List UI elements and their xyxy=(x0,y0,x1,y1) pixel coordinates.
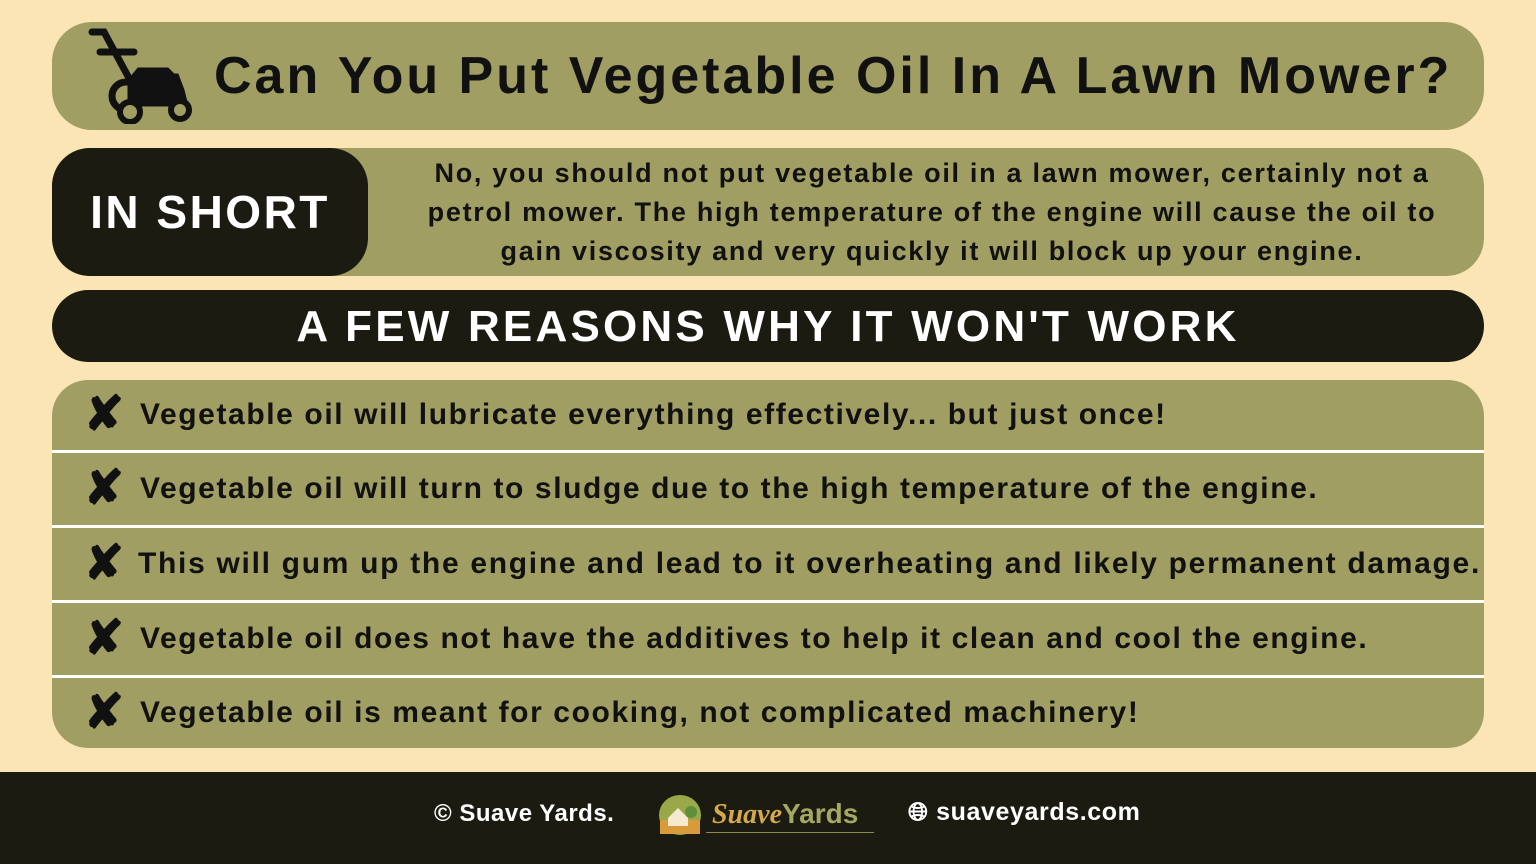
reason 3: ✘ xyxy=(84,537,124,590)
reason 5: ✘ xyxy=(84,686,124,739)
footer xyxy=(0,772,1536,864)
reason 5 xyxy=(52,678,1484,748)
reason 3 xyxy=(52,528,1484,600)
heading: reasons xyxy=(52,290,1484,362)
reason 4: Vegetable oil does not have the additives to help it clean and cool the engine. xyxy=(140,622,1368,655)
copyright: © Suave Yards. xyxy=(434,800,614,827)
logo: SuaveYards xyxy=(712,798,858,830)
title bar xyxy=(52,22,1484,130)
reason 1 xyxy=(52,380,1484,450)
title: Can You Put Vegetable Oil In A Lawn Mower? xyxy=(214,47,1452,105)
text: answer: gain viscosity and very quickly it will block up your engine. xyxy=(501,236,1363,266)
logo xyxy=(659,795,874,835)
panel: in short xyxy=(52,148,1484,276)
text: answer: petrol mower. The high temperature of the engine will cause the oil to xyxy=(428,197,1436,227)
reason 5: Vegetable oil is meant for cooking, not complicated machinery! xyxy=(140,696,1139,729)
panel: reasons list xyxy=(52,380,1484,748)
label: in short xyxy=(52,148,368,276)
reason 2 xyxy=(52,453,1484,525)
reason 1: ✘ xyxy=(84,388,124,441)
text: answer: No, you should not put vegetable oil in a lawn mower, certainly not a xyxy=(435,158,1429,188)
text: answer xyxy=(428,158,1436,266)
reason 3: This will gum up the engine and lead to it overheating and likely permanent damage. xyxy=(138,547,1481,580)
website: 🌐︎ suaveyards.com xyxy=(908,798,1140,826)
reason 4 xyxy=(52,603,1484,675)
heading: reasons: A FEW REASONS WHY IT WON'T WORK xyxy=(296,302,1240,351)
reason 2: Vegetable oil will turn to sludge due to the high temperature of the engine. xyxy=(140,472,1318,505)
reason 4: ✘ xyxy=(84,612,124,665)
label: in short: IN SHORT xyxy=(90,186,330,238)
reason 1: Vegetable oil will lubricate everything effectively... but just once! xyxy=(140,398,1167,431)
reason 2: ✘ xyxy=(84,462,124,515)
icon: lawn mower xyxy=(88,28,192,124)
